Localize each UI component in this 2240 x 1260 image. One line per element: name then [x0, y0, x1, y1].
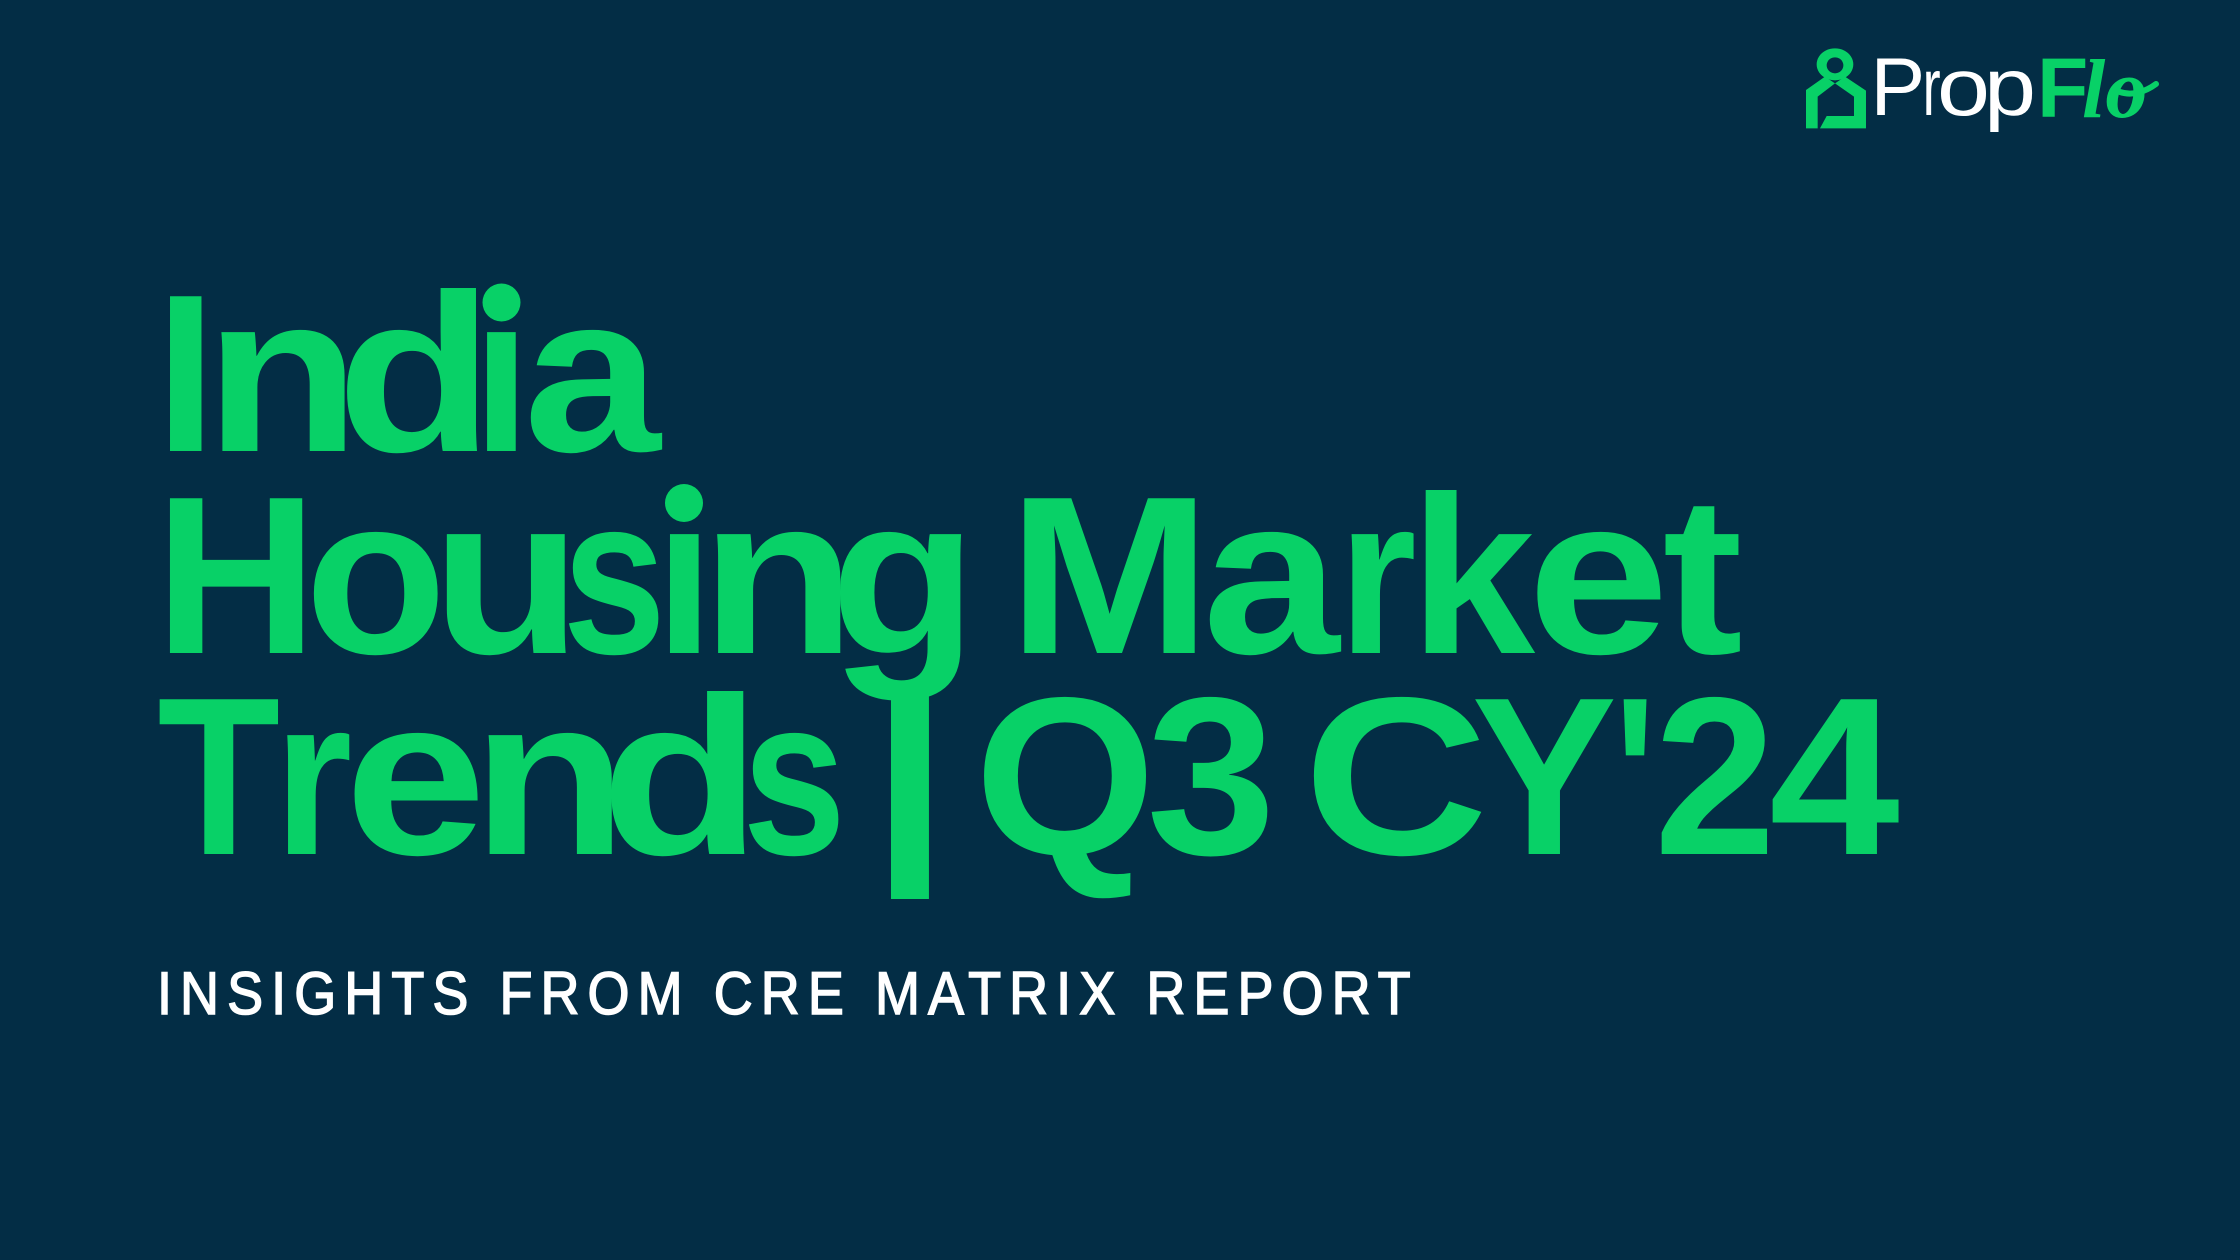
title line 3: 4: [1769, 650, 1900, 902]
title line 2: e: [1527, 449, 1669, 701]
title line 1: I: [155, 247, 216, 499]
title line 3: s: [742, 650, 846, 902]
title line 3: Y: [1471, 650, 1617, 902]
title line 1: n: [205, 247, 360, 499]
title: [155, 247, 1900, 902]
title line 2: M: [1008, 449, 1211, 701]
title line 3: T: [157, 650, 280, 902]
logo wordmark: Prop: p: [1984, 42, 2036, 133]
title line 3: 2: [1654, 650, 1776, 902]
logo: PropFlo: [1806, 41, 2156, 136]
title line 2: k: [1410, 449, 1536, 701]
title line 2: H: [155, 449, 317, 701]
logo wordmark: Flo: lo: [2082, 43, 2147, 136]
title line 3: e: [345, 650, 486, 902]
title line 3: r: [274, 650, 352, 902]
title line 2: a: [1203, 449, 1342, 701]
title line 2: i: [655, 449, 713, 701]
title line 2: g: [830, 449, 977, 701]
title line 3: n: [472, 650, 628, 902]
logo wordmark: Prop: o: [1937, 42, 1990, 133]
logo wordmark: Flo: F: [2037, 41, 2088, 135]
title line 3: d: [601, 650, 762, 902]
title line 1: a: [524, 247, 663, 499]
title line 1: i: [472, 247, 530, 499]
title line 2: o: [305, 449, 447, 701]
title line 3: Q: [974, 650, 1156, 902]
title line 2: r: [1338, 449, 1417, 701]
title line 3: 3: [1146, 650, 1276, 902]
round dot on i, line 2: [664, 480, 704, 533]
icon: person and house: [1806, 48, 1866, 128]
title line 3: |: [868, 645, 951, 899]
round dot on i, line 1: [482, 280, 522, 331]
title line 2: n: [700, 449, 856, 701]
logo swoosh: [2120, 84, 2156, 94]
logo wordmark: Prop: P: [1870, 42, 1925, 133]
subtitle: INSIGHTS FROM CRE MATRIX REPORT: [157, 960, 1411, 1028]
title line 3: C: [1303, 650, 1488, 902]
title line 2: u: [432, 449, 582, 701]
title line 2: t: [1663, 449, 1743, 701]
logo wordmark: Prop: r: [1923, 42, 1941, 133]
title line 2: s: [562, 449, 666, 701]
title line 3: ': [1614, 650, 1655, 902]
title line 1: d: [336, 247, 494, 499]
